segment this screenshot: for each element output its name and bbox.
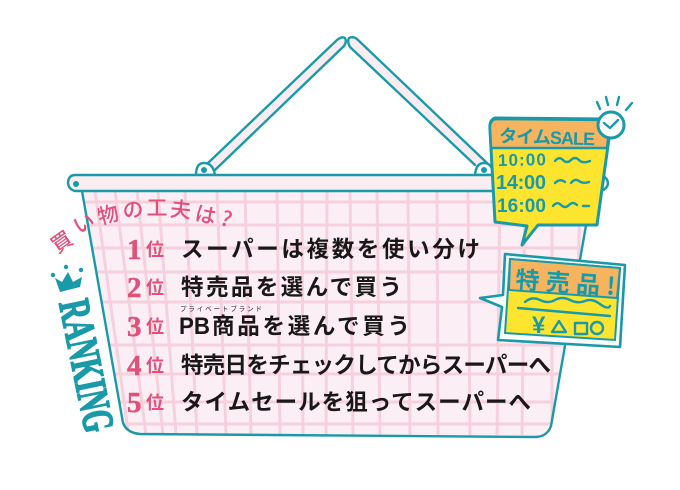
callout: special sale bbox=[480, 254, 625, 347]
callout: time sale: タイムSALE bbox=[499, 126, 595, 149]
heading: curved question: 夫 bbox=[169, 193, 193, 225]
heading: curved question: の bbox=[120, 193, 145, 225]
heading: curved question: 工 bbox=[146, 192, 168, 222]
rank 3: 位 bbox=[146, 313, 164, 339]
heading: curved question: 物 bbox=[94, 197, 122, 231]
icon: clock bbox=[597, 97, 632, 138]
basket rim bbox=[68, 175, 608, 191]
callout: special sale: ¥ bbox=[532, 312, 546, 339]
rank 2: 2 bbox=[127, 272, 142, 304]
rank 1: 1 bbox=[127, 234, 142, 266]
heading: curved question: は bbox=[192, 197, 219, 231]
rank 1 bbox=[127, 234, 480, 266]
heading: curved question: い bbox=[68, 205, 99, 241]
rank 2: 特売品を選んで買う bbox=[181, 275, 402, 300]
heading: curved question: 買 bbox=[44, 223, 79, 260]
heading: curved question: ? bbox=[217, 203, 236, 234]
rank 5: 5 bbox=[127, 387, 142, 419]
rank 4: 特売日をチェックしてからスーパーへ bbox=[181, 353, 551, 378]
heading: curved question bbox=[44, 192, 236, 260]
rank 3 bbox=[127, 303, 410, 343]
rank 5: 位 bbox=[146, 389, 164, 415]
rank 3: 商品を選んで買う bbox=[212, 314, 410, 339]
rank 2 bbox=[127, 272, 402, 304]
callout: time sale: 10:00 bbox=[498, 150, 546, 170]
ranking list bbox=[127, 234, 551, 419]
callout: time sale: 14:00 bbox=[496, 172, 546, 194]
rank 2: 位 bbox=[146, 274, 164, 300]
rank 4: 4 bbox=[127, 350, 142, 382]
rank 1: スーパーは複数を使い分け bbox=[181, 237, 480, 262]
callout: special sale: 特売品! bbox=[515, 260, 617, 302]
infographic: basket ranking bbox=[50, 36, 634, 438]
rank 5 bbox=[127, 387, 531, 419]
rank 3: プライベートブランド bbox=[180, 303, 262, 313]
basket body with grid bbox=[80, 191, 600, 437]
rank 3: 3 bbox=[127, 311, 142, 343]
callout: time sale: 16:00 bbox=[497, 196, 546, 217]
basket handle bbox=[196, 37, 494, 175]
crown icon bbox=[51, 265, 83, 292]
rank 5: タイムセールを狙ってスーパーへ bbox=[181, 390, 531, 415]
rank 3: PB bbox=[179, 313, 210, 340]
rank 4 bbox=[127, 350, 551, 382]
rank 4: 位 bbox=[146, 352, 164, 378]
rank 1: 位 bbox=[146, 236, 164, 262]
callout: time sale bbox=[490, 118, 611, 245]
